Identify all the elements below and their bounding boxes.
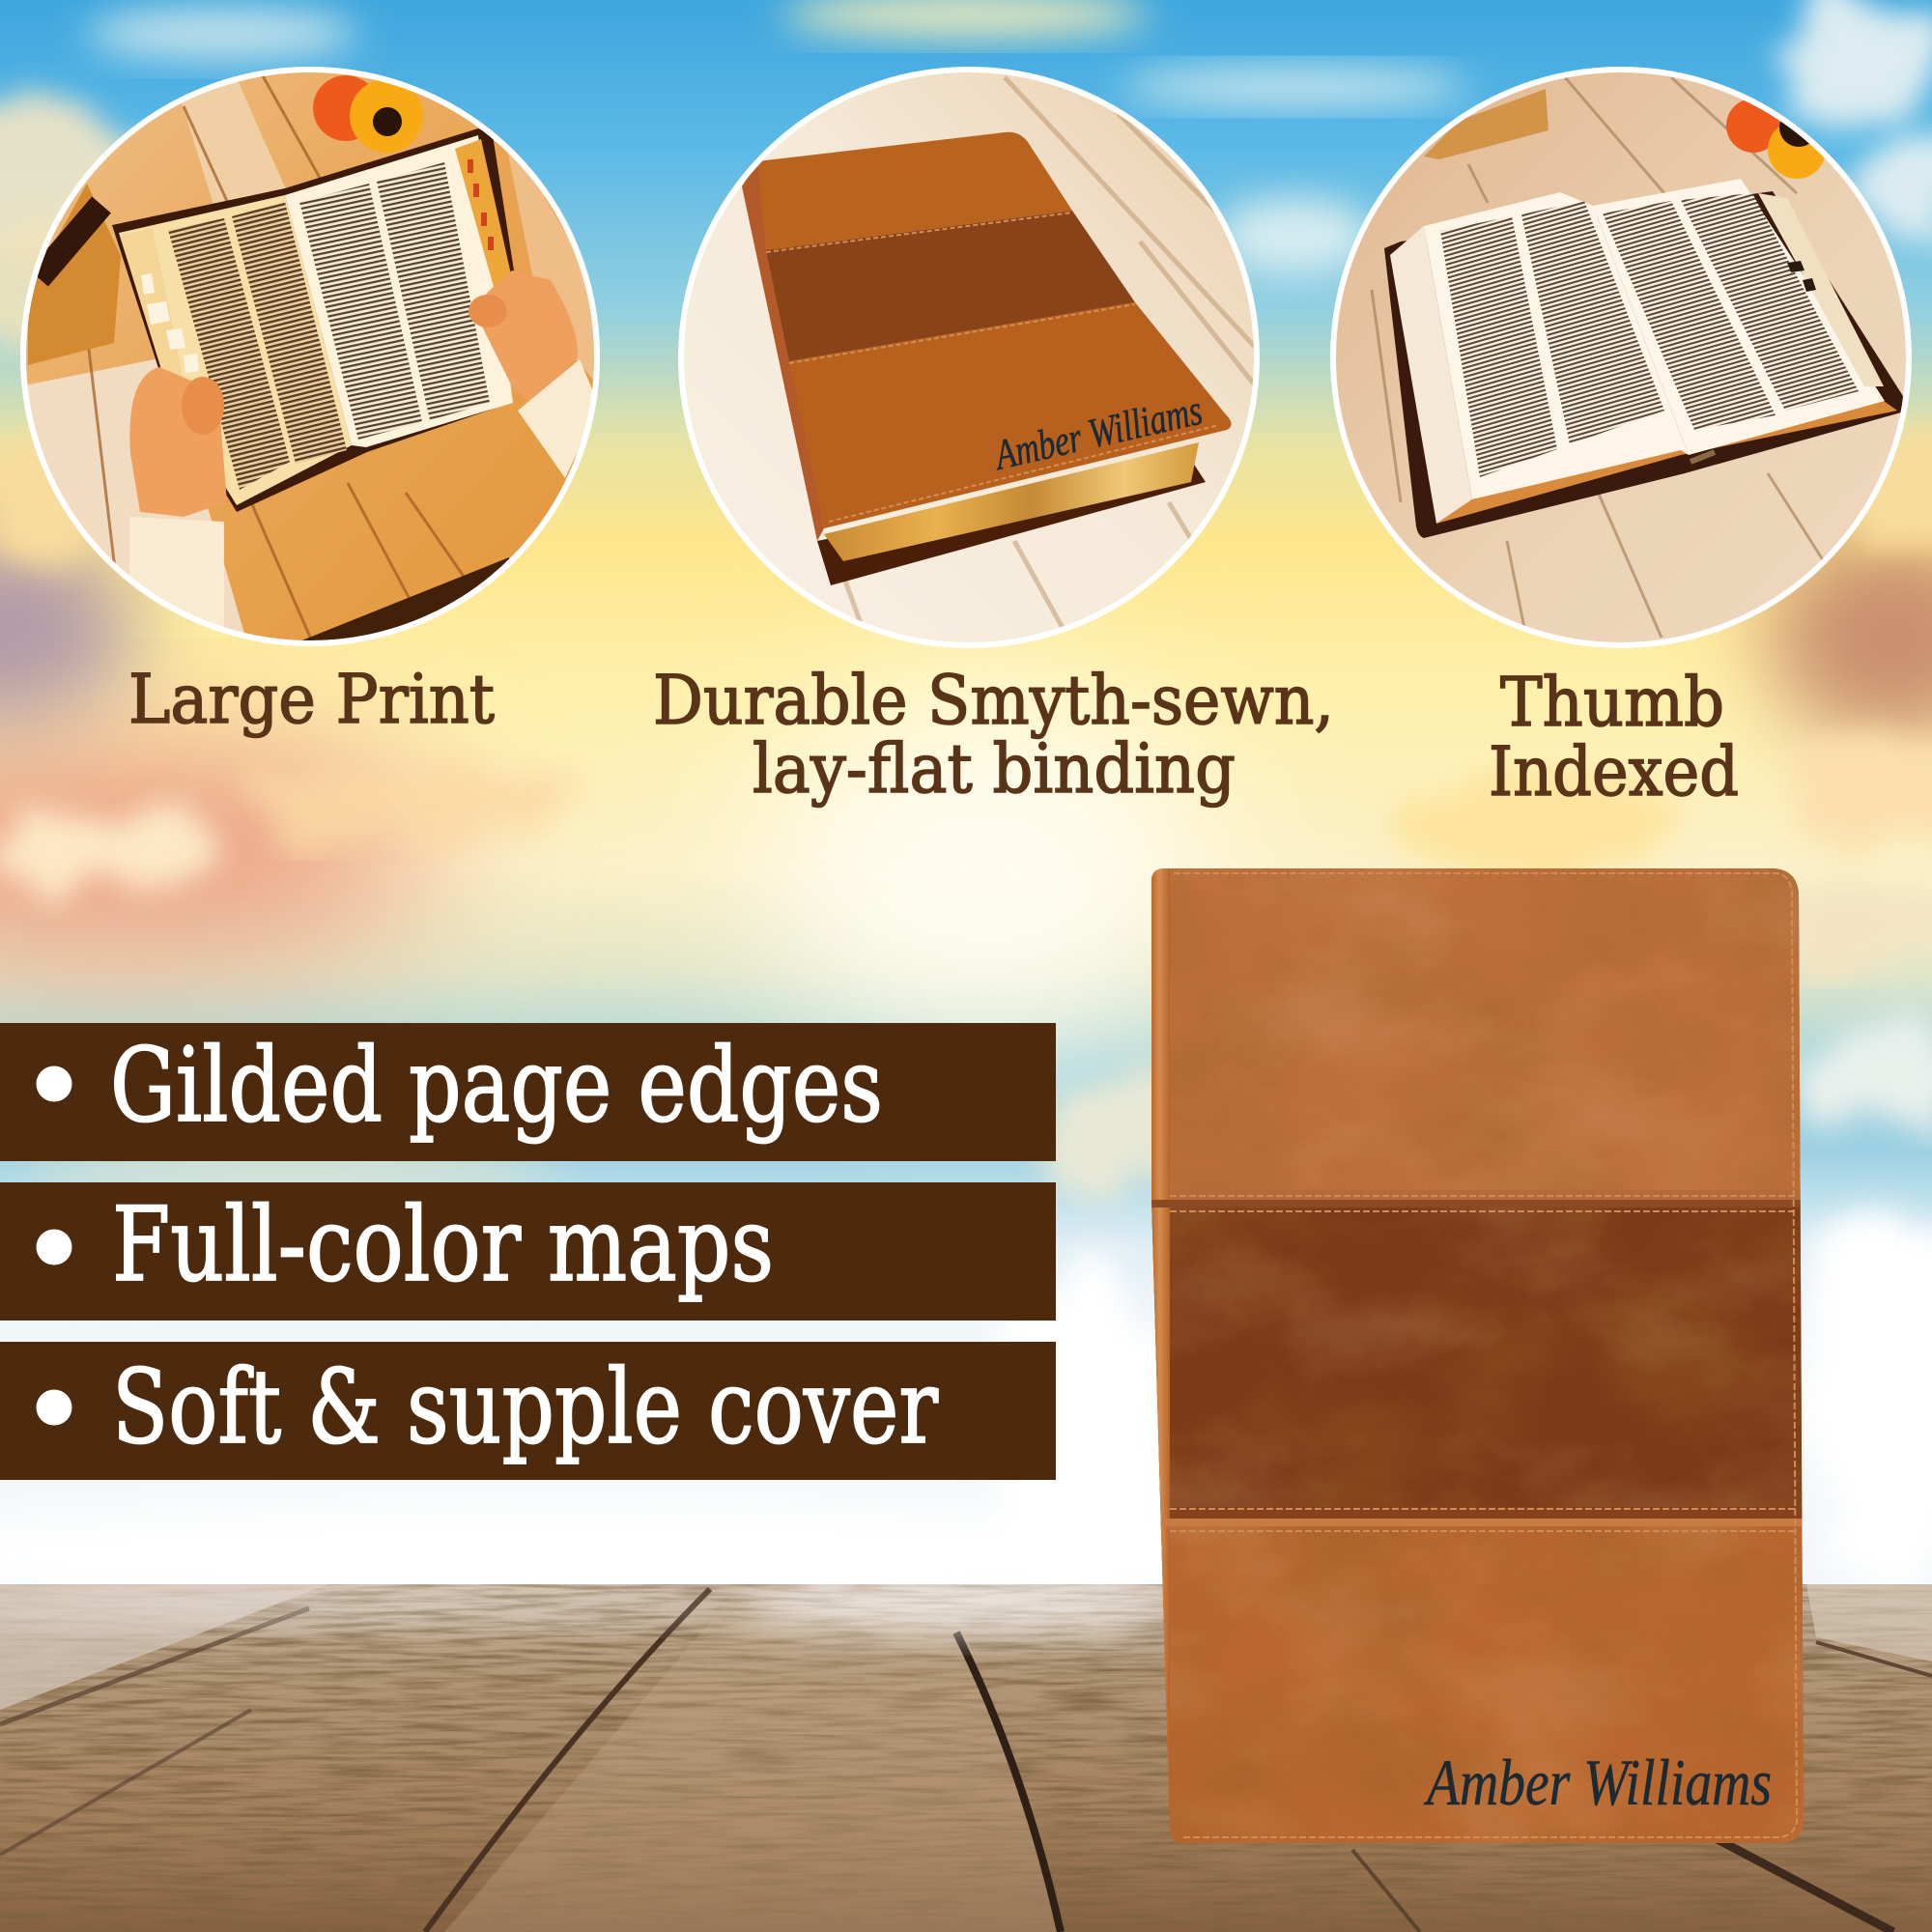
caption: Thumb Indexed: Thumb: [1500, 663, 1724, 742]
circle photo: closed Bible: [676, 68, 1265, 657]
caption: Large Print: Large Print: [128, 660, 495, 739]
bullet: Soft and supple cover: Soft & supple cover: [112, 1348, 938, 1466]
circle photo: large print: [19, 58, 609, 667]
bullet: Full-color maps: Full-color maps: [112, 1185, 774, 1304]
caption: Thumb Indexed: Indexed: [1489, 732, 1739, 811]
circle photo: open Bible with thumb index: [1328, 68, 1918, 657]
bullet: Full-color maps: [0, 1182, 1056, 1321]
caption: Durable binding: Durable Smyth-sewn,: [653, 661, 1334, 740]
leather Bible: Amber Williams: [1424, 1746, 1772, 1819]
caption: Thumb Indexed: [1489, 663, 1739, 811]
wooden table: [0, 1575, 1932, 1932]
caption: Durable binding: lay-flat binding: [753, 729, 1236, 809]
bullet: Gilded page edges: Gilded page edges: [110, 1026, 883, 1145]
caption: Durable binding: [653, 661, 1334, 809]
leather Bible: [1145, 865, 1811, 1850]
circle photo: closed Bible: Amber Williams: [988, 386, 1207, 479]
